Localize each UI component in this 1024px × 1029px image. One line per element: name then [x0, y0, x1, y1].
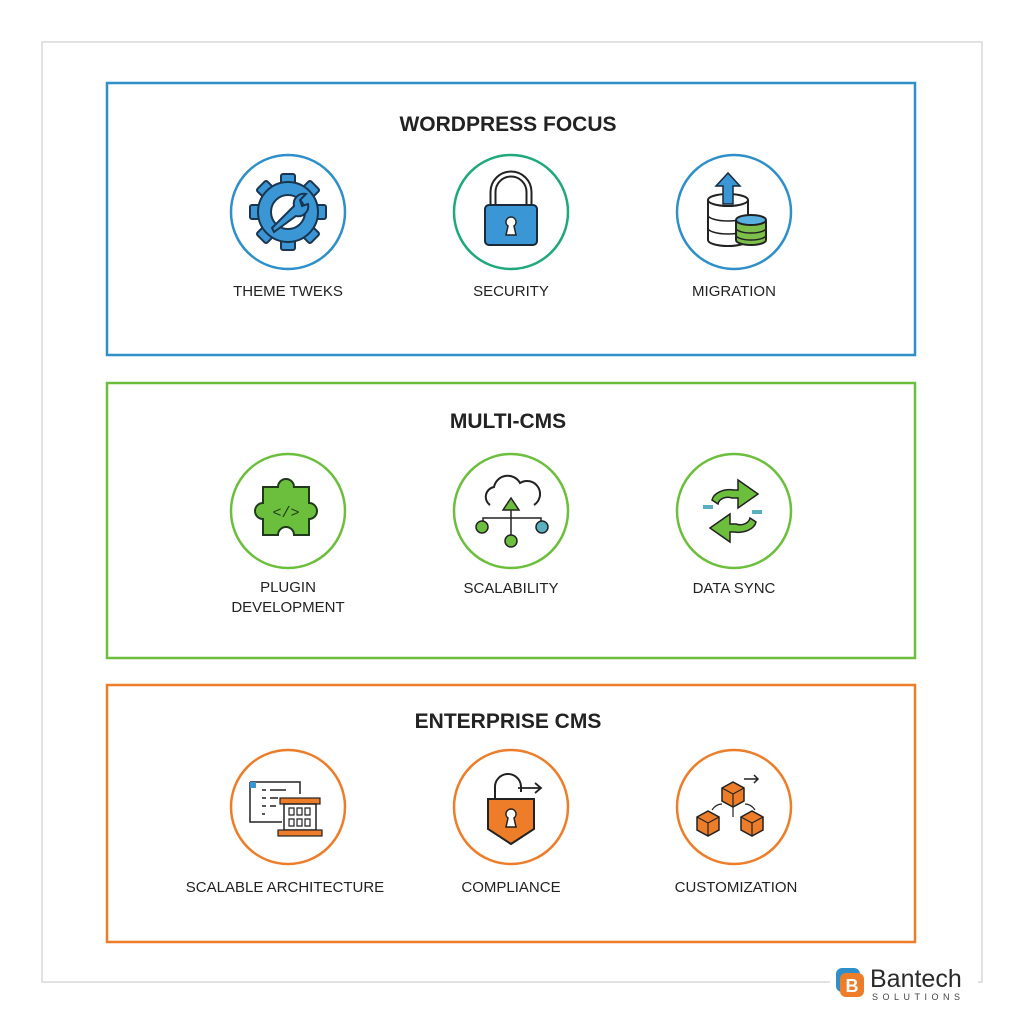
panel: multi-cms [107, 383, 915, 658]
panel: wordpress focus [107, 83, 915, 355]
panel: enterprise cms [107, 685, 915, 942]
label: theme tweaks: THEME TWEKS [233, 283, 343, 300]
icon: migration database [677, 155, 791, 269]
icon: compliance lock [454, 750, 568, 864]
label: scalability: SCALABILITY [463, 580, 559, 597]
logo: bantech solutions: B [846, 976, 858, 996]
label: data sync: DATA SYNC [693, 580, 776, 597]
icon: plugin puzzle [231, 454, 345, 568]
icon: security lock [454, 155, 568, 269]
label: compliance: COMPLIANCE [461, 879, 561, 896]
icon: plugin puzzle: </> [272, 505, 300, 522]
heading: multi-cms: MULTI-CMS [450, 410, 566, 433]
label: security: SECURITY [473, 283, 549, 300]
logo: bantech solutions [830, 962, 978, 1004]
icon: data sync arrows [677, 454, 791, 568]
icon: theme tweaks gear [231, 155, 345, 269]
heading: enterprise cms: ENTERPRISE CMS [415, 710, 601, 733]
heading: wordpress focus: WORDPRESS FOCUS [399, 113, 617, 136]
label: scalable architecture: SCALABLE ARCHITECTURE [186, 879, 384, 896]
label: plugin development: DEVELOPMENT [231, 599, 345, 616]
icon: customization cubes [677, 750, 791, 864]
label: plugin development: PLUGIN [260, 579, 316, 596]
icon: scalability cloud [454, 454, 568, 568]
icon: scalable architecture [231, 750, 345, 864]
label: customization: CUSTOMIZATION [675, 879, 797, 896]
logo: bantech solutions: Bantech [870, 965, 962, 993]
label: migration: MIGRATION [692, 283, 776, 300]
logo: bantech solutions: SOLUTIONS [872, 992, 965, 1002]
